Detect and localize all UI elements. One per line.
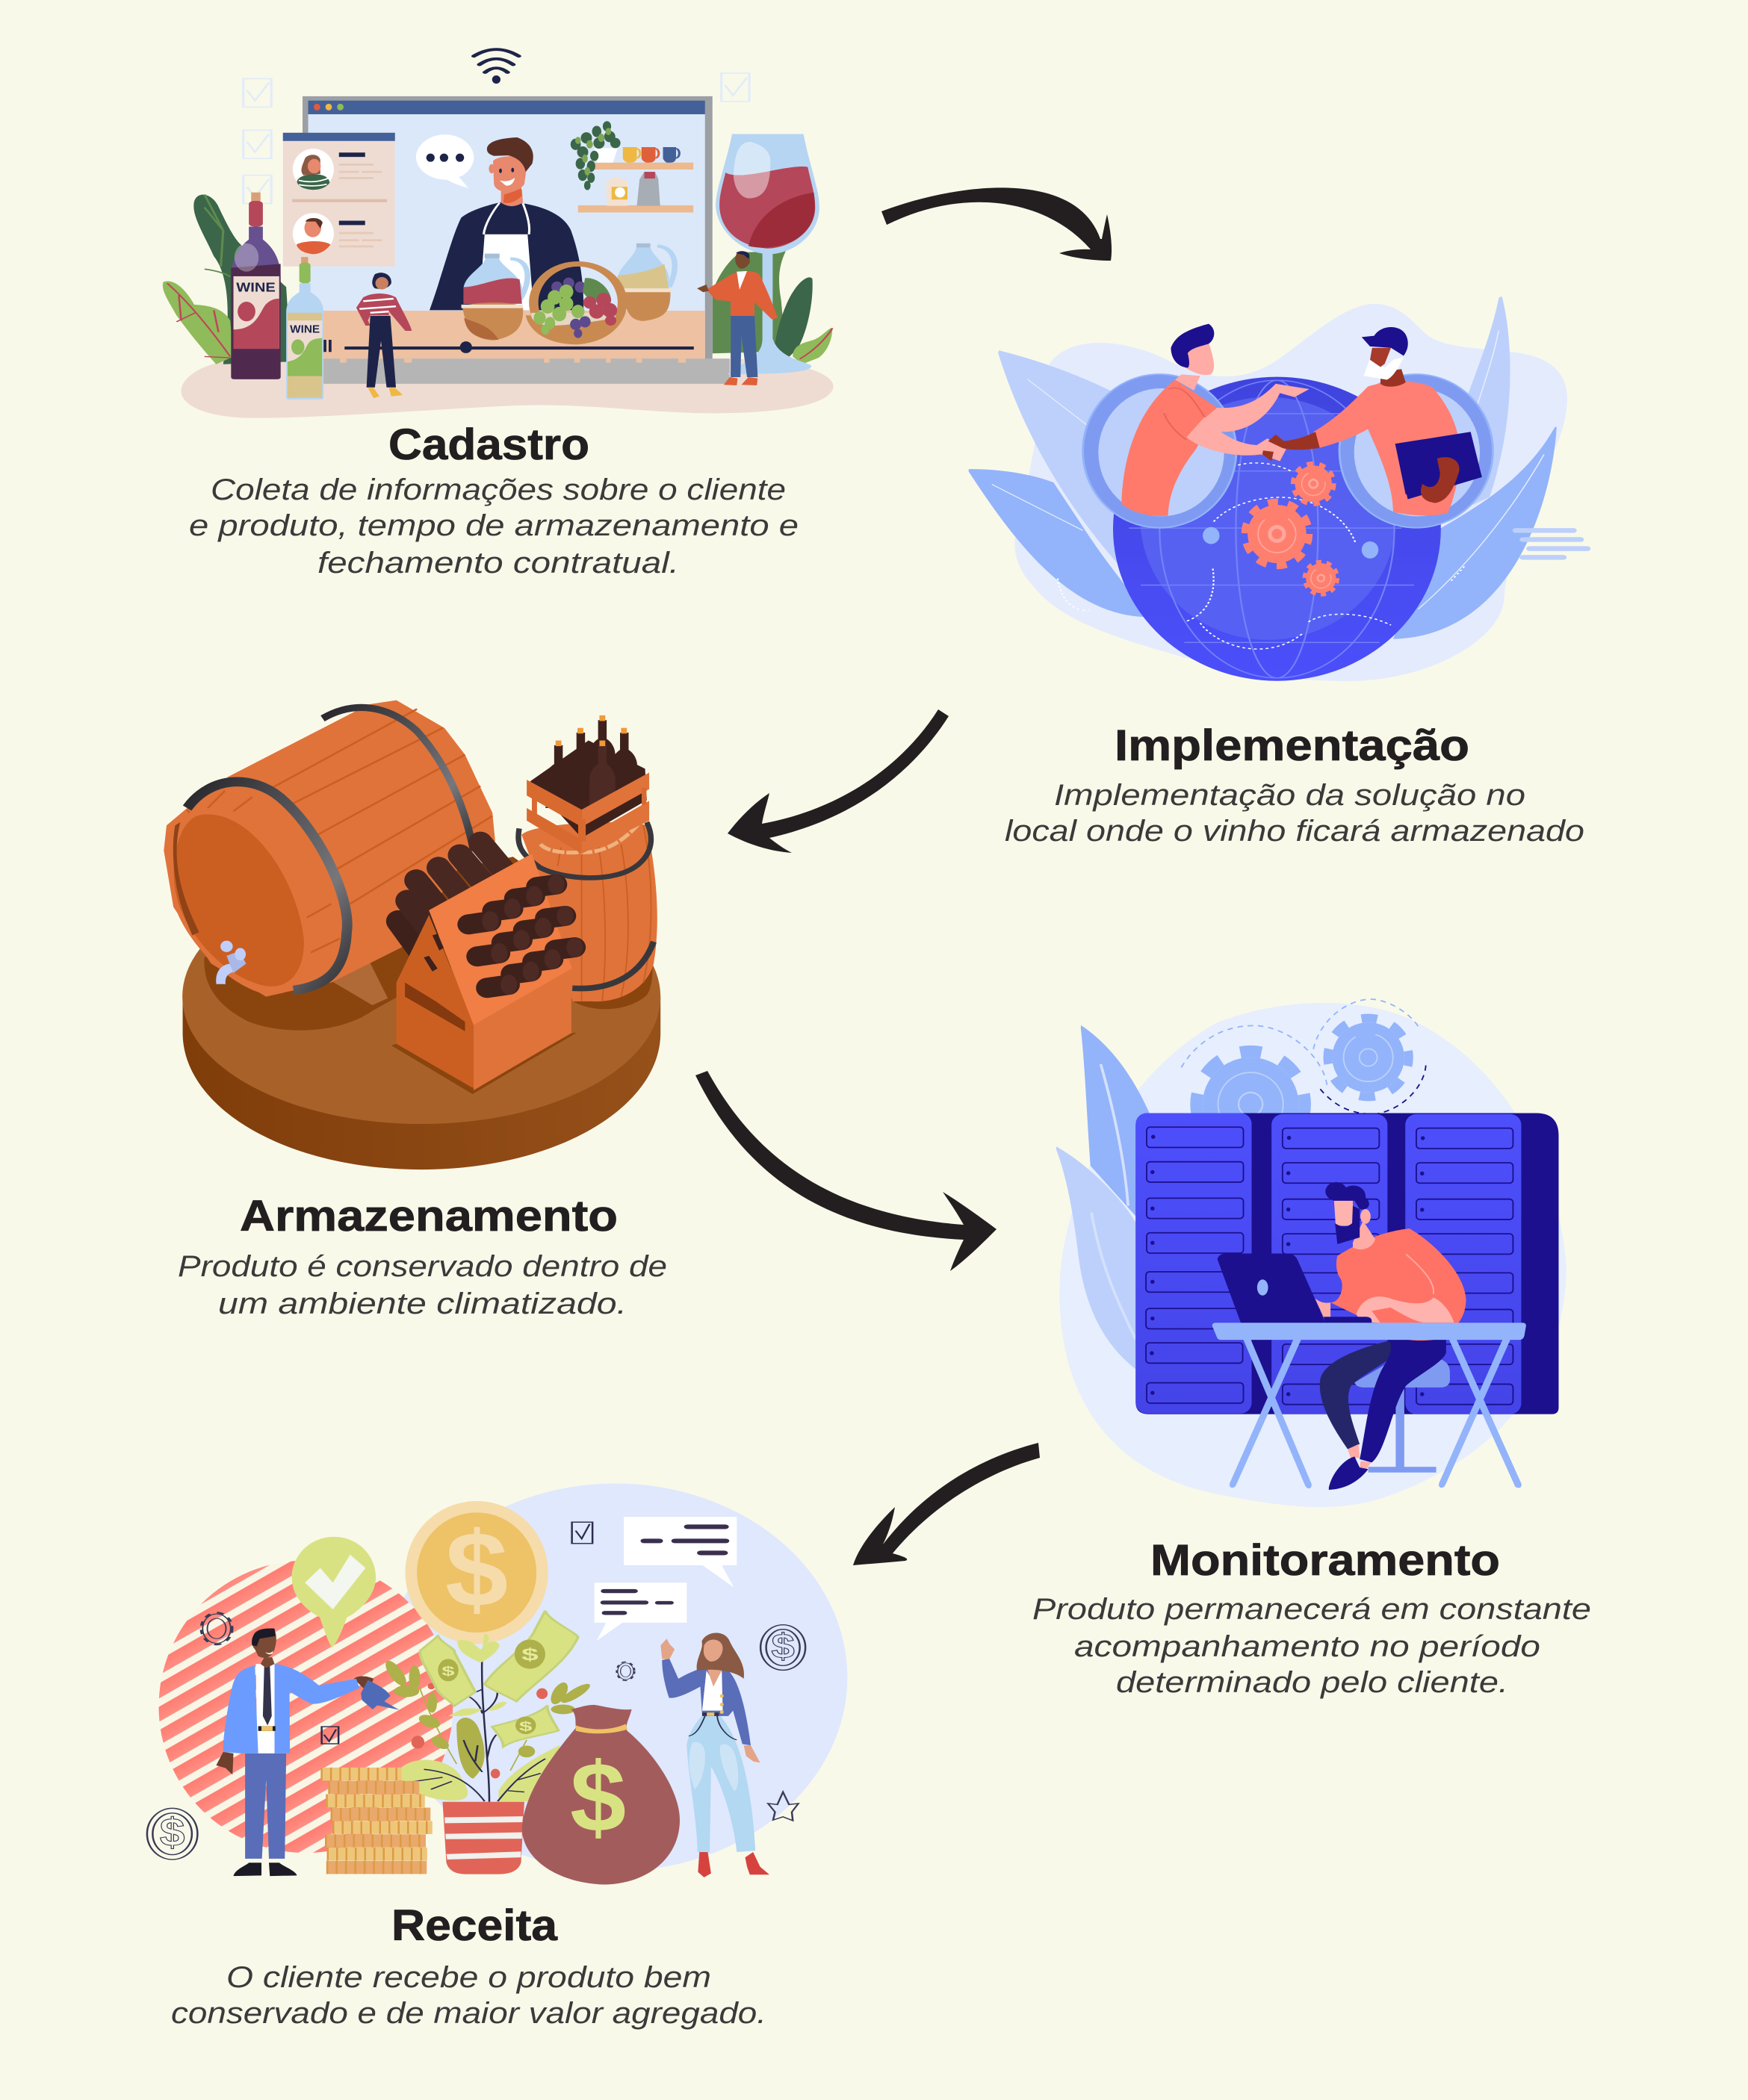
dollar bills: $: [521, 1645, 539, 1665]
ground blob: [181, 359, 834, 418]
grape basket: [526, 264, 622, 344]
icon: gold coin: $: [445, 1510, 508, 1630]
text block: Armazenamento: [178, 1192, 667, 1320]
back leaves left: [163, 194, 291, 364]
background blob: [1059, 1003, 1566, 1507]
icon: gold coin: [405, 1501, 548, 1644]
barrel stand: [331, 960, 388, 1005]
icon: large gear: [1245, 503, 1309, 565]
plant stems and leaves: [382, 1633, 594, 1802]
faint check boxes: [244, 73, 749, 203]
description: Armazenamento: Produto é conservado dentro de: [178, 1250, 667, 1283]
illustration: Receita money plant: [134, 1483, 847, 1885]
description: Implementação: local onde o vinho ficará armazenado: [1005, 815, 1584, 848]
leaf: front right: [1393, 426, 1557, 639]
description: Cadastro: e produto, tempo de armazenamento e: [189, 509, 799, 542]
floating check box: [322, 1522, 592, 1744]
heading: Cadastro: Cadastro: [388, 420, 589, 469]
icon: upper gear: [1293, 464, 1333, 504]
kitchen shelves with mugs, plant and grater: [571, 121, 693, 213]
flower pot: [442, 1802, 524, 1874]
description: Cadastro: [189, 473, 799, 580]
back leaves right: [713, 251, 832, 364]
icon: wifi: [474, 49, 518, 84]
profile panel: [283, 133, 395, 267]
leaf: back right: [1431, 296, 1510, 524]
crate with wine bottles: [527, 715, 649, 854]
heading: Implementação: Implementação: [1115, 721, 1469, 770]
wine glass: [716, 134, 819, 374]
heading: Monitoramento: Monitoramento: [1150, 1536, 1500, 1585]
description: Armazenamento: um ambiente climatizado.: [218, 1287, 627, 1320]
man with watering can: [216, 1629, 399, 1876]
person left: [1121, 324, 1310, 516]
description: Cadastro: Coleta de informações sobre o cliente: [211, 473, 786, 506]
illustration: Armazenamento barrels and wine racks: [164, 700, 660, 1169]
description: Monitoramento: determinado pelo cliente.: [1116, 1666, 1508, 1699]
person working: [1315, 1182, 1466, 1490]
leaf: back left: [998, 350, 1183, 585]
small barrel: [518, 822, 657, 1001]
portal rings: [1083, 374, 1493, 528]
stool: [1354, 1359, 1450, 1473]
description: Monitoramento: [1032, 1593, 1591, 1699]
description: Monitoramento: Produto permanecerá em constante: [1032, 1593, 1591, 1626]
leaf veins and motion lines: [992, 330, 1590, 611]
large barrel: [164, 700, 495, 997]
round platform: [182, 869, 660, 1169]
illustration: Cadastro online wine registration: [163, 49, 834, 418]
chef: [430, 137, 583, 310]
icon: gear small: [1327, 1018, 1409, 1097]
white wine bottle: WINE: [290, 323, 320, 335]
speech bubbles: [595, 1517, 737, 1641]
leaves: [1056, 1025, 1152, 1369]
illustration: Implementação handshake and globe: [969, 296, 1590, 681]
description: Receita: O cliente recebe o produto bem: [226, 1961, 711, 1994]
arrow: Cadastro to Implementação: [881, 187, 1112, 261]
arrow: Implementação to Armazenamento: [728, 709, 949, 853]
leaf: front left: [969, 469, 1150, 617]
background circle: [383, 1483, 847, 1871]
description: Armazenamento: [178, 1250, 667, 1320]
woman in striped sweater: [356, 273, 412, 398]
description: Monitoramento: acompanhamento no período: [1074, 1630, 1540, 1663]
text block: Implementação: [1005, 721, 1584, 848]
money bag: [522, 1705, 680, 1885]
icon: check bubble: [292, 1537, 376, 1648]
man in orange sweater: [697, 251, 778, 385]
heading: Receita: Receita: [391, 1901, 558, 1950]
dollar badges and small gears: $: [771, 1627, 795, 1665]
dollar bills: $: [519, 1719, 532, 1734]
speech bubble: [416, 134, 474, 188]
description: Receita: [171, 1961, 766, 2030]
arrow: Monitoramento to Receita: [853, 1443, 1040, 1565]
description: Receita: conservado e de maior valor agregado.: [171, 1997, 766, 2030]
illustration: Monitoramento server room: [1056, 999, 1566, 1507]
arrow: Armazenamento to Monitoramento: [695, 1071, 997, 1271]
woman pointing: [660, 1633, 769, 1877]
floor shadow: [204, 857, 652, 1031]
money bag: $: [570, 1742, 626, 1852]
white wine bottle: [286, 257, 323, 400]
text block: Cadastro: [189, 420, 799, 580]
description: Implementação: Implementação da solução no: [1054, 779, 1525, 812]
server racks: [1135, 1113, 1559, 1414]
icon: gear large: [1197, 1051, 1305, 1157]
striped coral circle: [158, 1561, 453, 1853]
dashed orbits: [1181, 999, 1426, 1114]
dollar bills: $: [441, 1664, 455, 1679]
desk: [1212, 1323, 1526, 1488]
text block: Monitoramento: [1032, 1536, 1591, 1699]
dollar bills: [420, 1611, 578, 1747]
dollar badges and small gears: $: [160, 1810, 185, 1854]
description: Implementação: [1005, 779, 1584, 848]
stacked coins: [320, 1774, 433, 1868]
dollar badges and small gears: [147, 1612, 805, 1860]
red wine bottle: [231, 193, 281, 379]
wine rack: [391, 842, 583, 1094]
globe: [1113, 377, 1441, 681]
browser window: [303, 96, 730, 384]
left jug of red wine: [462, 254, 527, 341]
icon: lower gear: [1304, 562, 1337, 594]
heading: Armazenamento: Armazenamento: [240, 1192, 618, 1240]
description: Cadastro: fechamento contratual.: [317, 547, 679, 580]
background blob: [1014, 304, 1567, 681]
person right with folder: [1262, 327, 1482, 515]
laptop: [1218, 1253, 1372, 1324]
right jug of white wine: [618, 243, 675, 321]
red wine bottle: WINE: [236, 280, 276, 294]
text block: Receita: [171, 1901, 766, 2030]
